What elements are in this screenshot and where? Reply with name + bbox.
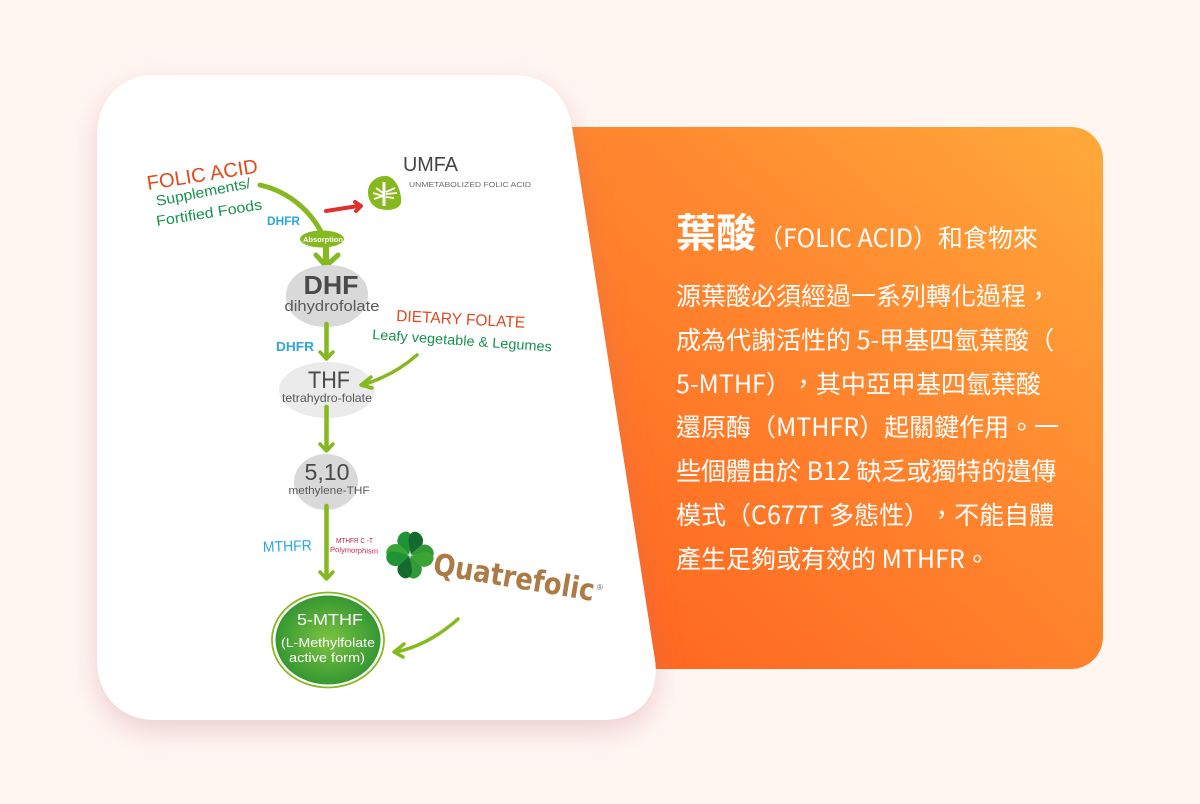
heading: dietary folate: DIETARY FOLATE [396, 308, 526, 332]
body text: 些個體由於 B12 缺乏或獨特的遺傳 [676, 452, 1056, 488]
text block: folic acid explanation [676, 201, 1059, 576]
body text: 源葉酸必須經過一系列轉化過程， [676, 277, 1051, 313]
arrow: THF to 5,10 [320, 407, 333, 451]
node: 5,10 methylene-THF: 5,10 [304, 459, 350, 485]
node: THF: tetrahydro-folate [282, 391, 372, 405]
label: MTHFR polymorphism [330, 536, 378, 556]
logo: Quatrefolic wordmark: ® [597, 583, 603, 592]
arrow: red to UMFA [326, 202, 361, 211]
heading: 葉酸: 葉酸（FOLIC ACID）和食物來 [676, 201, 1038, 259]
body text: 還原酶（MTHFR）起關鍵作用。一 [676, 408, 1059, 444]
logo: Quatrefolic wordmark: Quatrefolic [431, 547, 597, 609]
node: 5-MTHF active form [272, 592, 384, 688]
node: THF: THF [308, 367, 350, 394]
node: DHF: DHF [304, 270, 358, 300]
body text: 模式（C677T 多態性），不能自體 [676, 496, 1054, 532]
body text: 產生足夠或有效的 MTHFR。 [676, 540, 990, 576]
node: THF [279, 362, 375, 418]
node: 5-MTHF active form: active form) [289, 650, 365, 665]
node: 5-MTHF active form: (L-Methylfolate [281, 635, 375, 650]
label: MTHFR polymorphism: MTHFR C -T [336, 536, 373, 545]
icon: four-leaf clover [384, 529, 437, 581]
heading: folic acid: FOLIC ACID [145, 156, 259, 195]
label: DHFR middle: DHFR [276, 339, 315, 354]
label: MTHFR polymorphism: Polymorphism [330, 545, 378, 556]
arrow: dietary folate to THF [361, 355, 417, 388]
text: fortified foods: Fortified Foods [155, 197, 263, 230]
label: DHFR top: DHFR [267, 214, 300, 228]
text: unmetabolized folic acid: UNMETABOLIZED FOLIC ACID [409, 180, 531, 189]
label: absorption: Absorption [303, 235, 343, 244]
heading: UMFA: UMFA [403, 154, 459, 176]
arrow: DHF to THF [320, 324, 333, 359]
node: DHF [284, 265, 380, 327]
body text: 成為代謝活性的 5-甲基四氫葉酸（ [676, 321, 1054, 357]
label: absorption [300, 230, 344, 248]
label: MTHFR: MTHFR [263, 537, 312, 556]
arrow: absorption curve [260, 185, 338, 266]
node: 5,10 methylene-THF [288, 454, 370, 510]
node: 5,10 methylene-THF: methylene-THF [288, 485, 370, 497]
arrow: Quatrefolic to 5-MTHF [394, 619, 458, 657]
body text [676, 277, 1059, 576]
icon: UMFA green blob [368, 176, 401, 210]
body text: 5-MTHF），其中亞甲基四氫葉酸 [676, 365, 1041, 401]
text: leafy vegetable and legumes: Leafy vegetable & Legumes [372, 326, 552, 355]
panel: orange text background [520, 127, 1103, 669]
node: DHF: dihydrofolate [284, 298, 380, 315]
arrow: 5,10 to 5-MTHF [320, 506, 333, 579]
text: supplements: Supplements/ [155, 176, 253, 210]
node: 5-MTHF active form: 5-MTHF [297, 612, 363, 629]
